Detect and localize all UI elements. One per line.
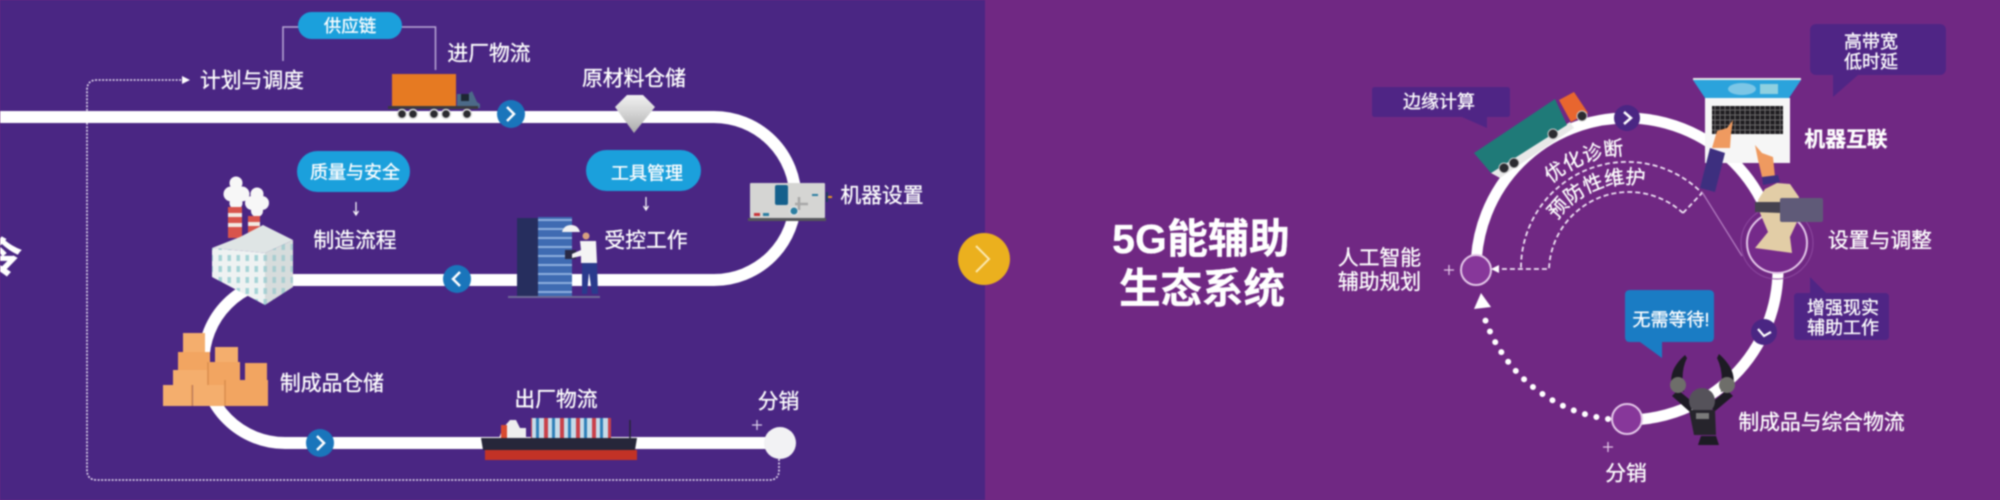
- icon: diamond: [615, 95, 655, 133]
- icon: cardboard boxes: [163, 333, 268, 406]
- label: ai assisted planning: [1338, 247, 1421, 294]
- label: distribution right: 分销: [1605, 462, 1647, 486]
- callout: high bandwidth low latency: 低时延: [1844, 52, 1898, 72]
- icon: blue chevron node bottom: [306, 429, 334, 457]
- label: ai assisted planning: 人工智能: [1338, 247, 1421, 270]
- icon: machine: [748, 183, 832, 221]
- ring around vr head: [1741, 207, 1813, 279]
- quality and safety pill and arrow: 质量与安全: [310, 162, 400, 182]
- icon: vr headset wearer: [1755, 183, 1823, 253]
- label: outbound logistics: 出厂物流: [514, 388, 598, 412]
- arrow: yellow next button: [958, 233, 1010, 285]
- callout: edge computing: [1372, 87, 1510, 128]
- callout: high bandwidth low latency: [1810, 24, 1946, 97]
- right hand and sleeve: [1755, 145, 1780, 185]
- icon: server rack and engineer: [508, 217, 600, 298]
- supply chain connector and pill: [283, 12, 436, 70]
- callout: high bandwidth low latency: 高带宽: [1844, 32, 1898, 52]
- icon: container ship: [481, 418, 637, 460]
- callout: augmented reality: [1794, 277, 1889, 340]
- callout: augmented reality: 增强现实: [1807, 298, 1879, 318]
- icon: blue chevron node top: [497, 100, 525, 128]
- icon: laptop with hands: [1693, 78, 1801, 192]
- label: machine interconnect: 机器互联: [1804, 128, 1888, 152]
- label: inbound logistics: 进厂物流: [447, 42, 531, 66]
- dotted return arc with arrow: [1474, 293, 1608, 419]
- panel: left manufacturing background: [0, 0, 985, 500]
- main white process path: [0, 117, 795, 443]
- icon: plus left node: [1444, 265, 1454, 275]
- title: 生态系统: [1119, 265, 1285, 312]
- label: controlled work: 受控工作: [604, 230, 688, 252]
- thin leader line: [1702, 192, 1742, 256]
- icon: orange container truck: [388, 74, 480, 118]
- left hand and sleeve: [1700, 120, 1733, 192]
- label: distribution left: 分销: [758, 390, 799, 414]
- label: raw material warehousing: 原材料仓储: [582, 68, 686, 90]
- callout: no waiting: [1625, 290, 1714, 358]
- icon: robot claw: [1670, 354, 1735, 445]
- callout: no waiting: 无需等待!: [1632, 310, 1710, 330]
- label: machine setup: 机器设置: [840, 184, 924, 208]
- title: [1112, 216, 1290, 312]
- icon: plus bottom node: [1603, 442, 1613, 452]
- dashed predictive maintenance band: [1491, 162, 1702, 273]
- icon: teal truck on ring: [1474, 92, 1588, 178]
- title: 5G能辅助: [1112, 216, 1290, 262]
- curved text: optimized diagnosis: 优化诊断: [1544, 137, 1624, 184]
- label: setup and adjustment: 设置与调整: [1828, 230, 1932, 252]
- callout: augmented reality: 辅助工作: [1807, 318, 1879, 338]
- node left: [1461, 255, 1491, 285]
- tool management pill and arrow: [586, 150, 701, 210]
- icon: chevron top: [1614, 105, 1640, 131]
- ring arc white: [1476, 118, 1778, 420]
- label: finished goods and integrated logistics: 制成品与综合物流: [1738, 412, 1905, 434]
- icon: factory: [212, 176, 293, 305]
- icon: plus left: [752, 420, 762, 430]
- curved text: preventive maintenance: 预防性维护: [1544, 166, 1646, 221]
- icon: blue chevron node middle: [443, 265, 471, 293]
- dotted feedback loop from distribution to planning: [87, 76, 779, 480]
- quality and safety pill and arrow: [297, 151, 410, 215]
- label: ai assisted planning: 辅助规划: [1338, 271, 1421, 294]
- callout: edge computing: 边缘计算: [1403, 92, 1475, 112]
- supply chain connector and pill: 供应链: [324, 16, 376, 36]
- icon: chevron right: [1751, 319, 1777, 345]
- panel: right ecosystem background: [985, 0, 2000, 500]
- label: manufacturing process: 制造流程: [313, 230, 397, 252]
- tool management pill and arrow: 工具管理: [611, 164, 683, 184]
- icon: end node left: [764, 427, 796, 459]
- label: finished goods warehousing: 制成品仓储: [280, 372, 384, 396]
- node bottom: [1612, 404, 1642, 434]
- label: planning and scheduling: 计划与调度: [200, 70, 304, 92]
